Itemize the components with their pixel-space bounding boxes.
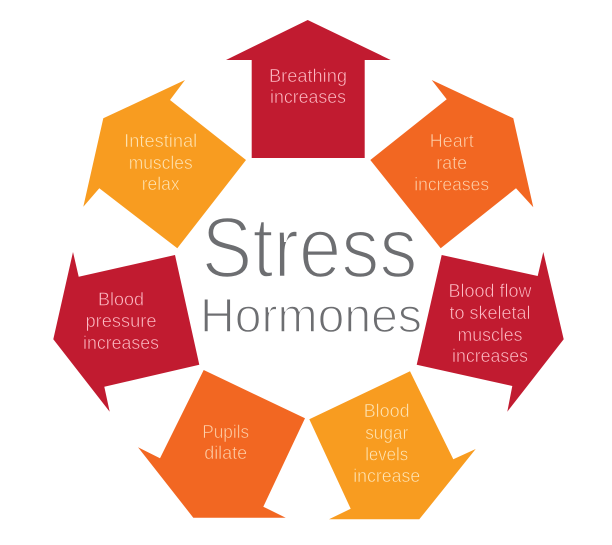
arrow: intestinal muscles relax: muscles xyxy=(129,153,193,173)
arrow: intestinal muscles relax: Intestinal xyxy=(124,131,197,151)
arrow: blood flow to skeletal muscles increases xyxy=(417,252,564,412)
arrow: blood flow to skeletal muscles increases: to skeletal xyxy=(450,303,530,323)
arrow: pupils dilate: Pupils xyxy=(202,422,249,442)
arrow: heart rate increases xyxy=(370,80,533,248)
arrow: breathing increases xyxy=(226,20,391,158)
arrow: pupils dilate xyxy=(138,370,305,518)
arrow: blood pressure increases: increases xyxy=(83,333,159,353)
arrow: blood sugar levels increase: levels xyxy=(365,444,408,464)
arrow: blood sugar levels increase: increase xyxy=(353,466,420,486)
arrow: blood sugar levels increase: sugar xyxy=(365,423,408,443)
arrow: blood flow to skeletal muscles increases: increases xyxy=(452,346,528,366)
arrow: blood pressure increases: Blood xyxy=(98,290,144,310)
arrow: intestinal muscles relax: relax xyxy=(142,174,180,194)
subtitle: Hormones: Hormones xyxy=(200,290,422,343)
arrow: intestinal muscles relax xyxy=(83,80,246,248)
title: Stress: Stress xyxy=(202,200,418,296)
arrow: heart rate increases: Heart xyxy=(430,131,474,151)
arrow: blood flow to skeletal muscles increases: Blood flow xyxy=(448,281,532,301)
arrow: blood sugar levels increase xyxy=(309,371,476,519)
arrow: breathing increases: Breathing xyxy=(269,66,347,86)
arrow: blood pressure increases: pressure xyxy=(86,311,156,331)
arrow: heart rate increases: increases xyxy=(414,174,489,194)
arrow: breathing increases: increases xyxy=(270,87,346,107)
arrow: blood flow to skeletal muscles increases: muscles xyxy=(458,325,522,345)
arrow: heart rate increases: rate xyxy=(436,153,467,173)
arrow: blood pressure increases xyxy=(53,252,199,412)
arrow: pupils dilate: dilate xyxy=(204,443,247,463)
arrow: blood sugar levels increase: Blood xyxy=(364,401,410,421)
